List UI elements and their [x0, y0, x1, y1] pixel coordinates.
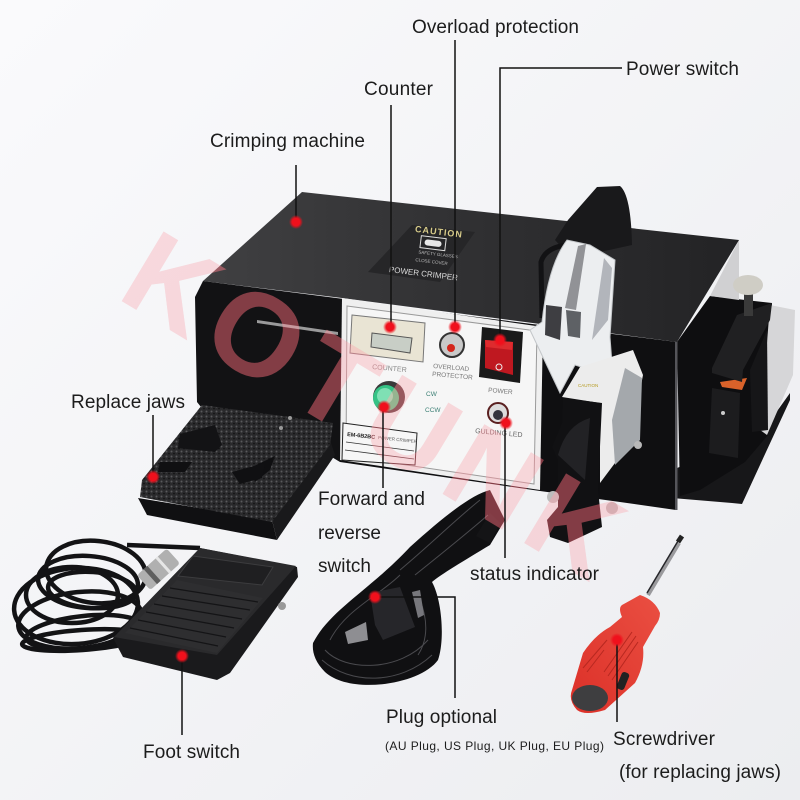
- counter display: COUNTER: [372, 364, 407, 374]
- left side plate: [195, 281, 344, 462]
- label: counter: Counter: [364, 79, 434, 100]
- control panel: [340, 298, 543, 490]
- pedal body: [113, 548, 298, 680]
- label: screwdriver: Screwdriver: [613, 729, 716, 750]
- label: foot switch: Foot switch: [143, 742, 240, 763]
- dark end cap: [572, 685, 608, 711]
- shaft: [648, 543, 679, 595]
- power cord: [313, 490, 505, 685]
- label: replace jaws: Replace jaws: [71, 392, 185, 413]
- guiding LED: GULDING LED: [475, 428, 523, 439]
- label: plug optional: [385, 707, 604, 753]
- jaws: [178, 425, 222, 452]
- power rocker switch: [479, 327, 523, 396]
- forward and reverse knob: CW: [426, 391, 438, 398]
- overload protector button: PROTECTOR: [432, 371, 473, 382]
- screwdriver: [571, 536, 682, 713]
- watermark: KOTUNK: [102, 206, 654, 610]
- crimping machine: [195, 186, 795, 543]
- label: forward and reverse switch: reverse: [318, 523, 381, 544]
- power rocker switch: POWER: [488, 387, 513, 396]
- forward and reverse knob: CCW: [425, 407, 441, 414]
- counter display: [350, 315, 425, 374]
- top cover with caution label: SAFETY GLASSES: [418, 249, 458, 259]
- label: power switch: Power switch: [626, 59, 739, 80]
- metal connector: [137, 549, 180, 590]
- replacement jaws foam tray: [138, 405, 335, 540]
- model plate: EM-6B2BC: [347, 432, 375, 441]
- rear side of the case: [677, 296, 772, 496]
- coil mass: [313, 490, 505, 685]
- label: screwdriver: (for replacing jaws): [619, 762, 781, 783]
- foot switch with cable: [12, 536, 298, 680]
- marker dots: [146, 215, 624, 663]
- pedal top: [114, 548, 296, 655]
- forward and reverse knob: [373, 381, 441, 414]
- front face: [340, 300, 677, 510]
- appliance connector: [476, 513, 500, 543]
- model plate: [342, 423, 418, 465]
- carrying handle: [541, 186, 632, 318]
- overload protector button: OVERLOAD: [433, 363, 470, 373]
- model plate: POWER CRIMPER: [378, 435, 418, 444]
- label: crimping machine: Crimping machine: [210, 131, 365, 152]
- label: overload protection: Overload protection: [412, 17, 579, 38]
- label: plug optional: Plug optional: [386, 707, 497, 728]
- guiding LED: [475, 403, 523, 439]
- label: plug optional: (AU Plug, US Plug, UK Plug, EU Plug): [385, 739, 604, 753]
- top cover with caution label: CLOSE COVER: [415, 257, 449, 266]
- top cover with caution label: POWER CRIMPER: [388, 265, 459, 282]
- leader lines: [153, 40, 622, 735]
- watermark: KOTUNK: [102, 206, 654, 610]
- coil highlights: [322, 500, 488, 678]
- crimping head: [547, 350, 643, 543]
- rear crimp block: [709, 275, 795, 458]
- ribbed pedal: [125, 580, 263, 653]
- crimping head: CAUTION: [578, 383, 598, 388]
- foam: [140, 405, 333, 522]
- label: forward and reverse switch: [318, 489, 425, 577]
- coil gaps: [345, 622, 368, 644]
- overload protector button: [432, 333, 473, 382]
- red handle: [571, 595, 660, 713]
- mains plug: [370, 587, 415, 640]
- clear safety guard: [530, 240, 615, 393]
- coiled cable: [12, 536, 200, 654]
- tray: [272, 440, 335, 540]
- label: screwdriver: [613, 729, 781, 783]
- label: forward and reverse switch: switch: [318, 556, 371, 577]
- label: status indicator: status indicator: [470, 564, 600, 585]
- top cover with caution label: CAUTION: [415, 224, 463, 240]
- label: forward and reverse switch: Forward and: [318, 489, 425, 510]
- top cover with caution label: [203, 192, 739, 342]
- machine base plate: [672, 393, 790, 504]
